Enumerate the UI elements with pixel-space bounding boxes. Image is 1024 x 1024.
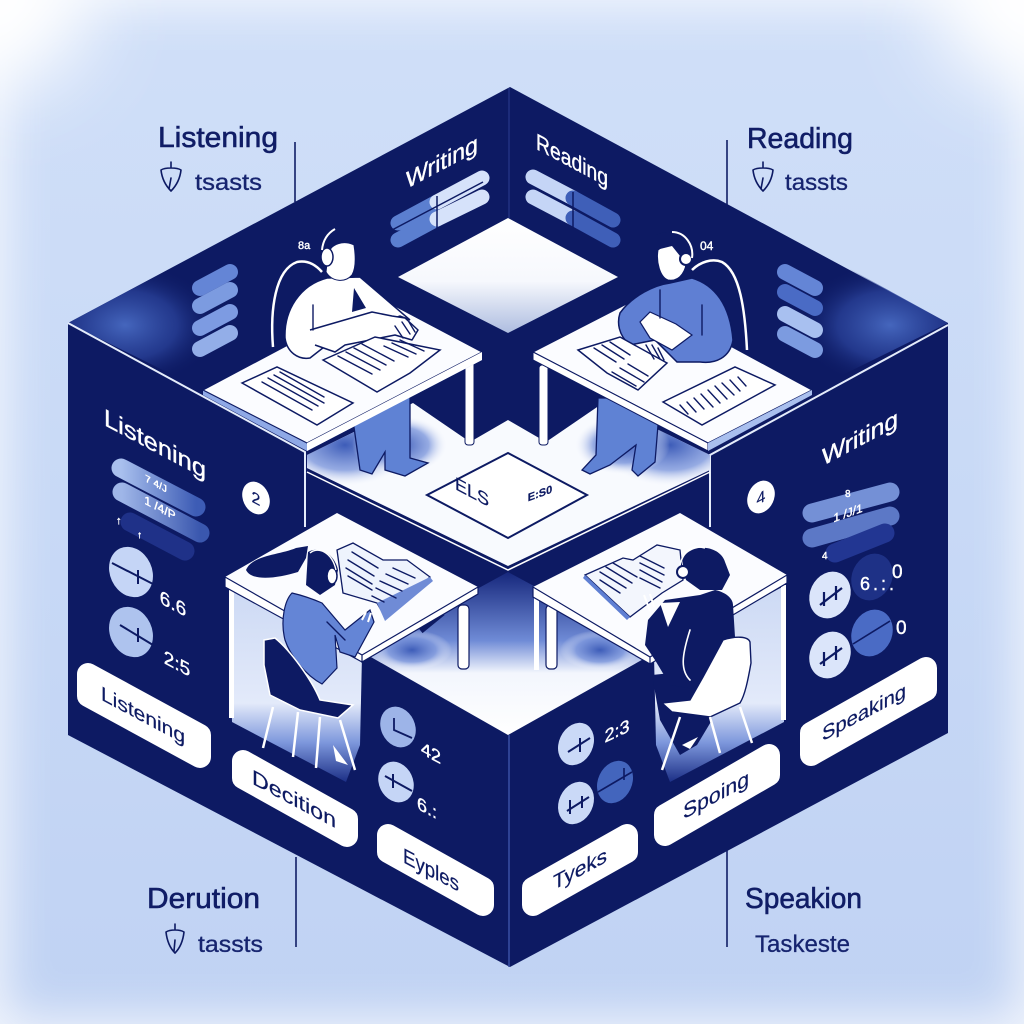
desk bottom left with person xyxy=(225,513,478,770)
right wall pills: 1 /J/1 xyxy=(833,501,863,525)
center left dials: 42 xyxy=(421,739,441,769)
pill: Decition xyxy=(243,761,347,836)
top left caption: Listening: tsasts xyxy=(195,169,262,195)
right wall pills: 8 xyxy=(845,489,851,500)
right wall pills: 4 xyxy=(822,551,828,562)
left wall pills: ↑ xyxy=(116,515,122,527)
right wall label: Writing: Writing xyxy=(822,405,898,472)
torso xyxy=(619,278,733,362)
alcove right xyxy=(654,585,786,782)
pill: Speaking xyxy=(811,668,926,755)
desk leg xyxy=(465,360,474,445)
right wall pills xyxy=(812,489,890,562)
legs xyxy=(582,398,658,476)
headphones xyxy=(321,229,335,266)
desk legs xyxy=(229,590,234,718)
top left caption: Listening: Listening xyxy=(158,122,278,154)
legs xyxy=(353,395,428,476)
open book xyxy=(583,545,683,620)
pill: Listening: Listening xyxy=(101,682,185,749)
wall seams xyxy=(68,323,948,527)
person tag: 04 xyxy=(700,239,714,253)
bottom left caption: Derution xyxy=(147,857,296,957)
lower body xyxy=(652,670,712,755)
top right caption: Reading: Reading xyxy=(747,123,853,155)
top left caption: Listening xyxy=(158,122,295,202)
left wall pills: 7 4/J xyxy=(145,473,167,496)
torso xyxy=(283,593,374,684)
open book xyxy=(578,337,667,390)
pill: Decition: Decition xyxy=(252,765,336,833)
hair xyxy=(246,546,308,578)
center left dials: 6.: xyxy=(417,794,437,824)
back wall pills right xyxy=(785,272,815,350)
chair arc xyxy=(692,260,747,350)
badge 4 xyxy=(742,476,780,518)
desk top right with person xyxy=(533,232,812,476)
pill: Listening xyxy=(88,674,200,757)
desk bottom right with person xyxy=(533,513,787,770)
top diamond xyxy=(398,218,618,333)
bottom right caption: Speakion: Speakion xyxy=(745,883,862,915)
left wall dials: 2:5 xyxy=(164,647,190,682)
center left dials xyxy=(372,701,441,824)
pill: Tyeks: Tyeks xyxy=(553,843,607,895)
ELS card: E:S0 xyxy=(528,484,552,504)
desk xyxy=(225,513,478,655)
bottom left caption: Derution: Derution xyxy=(147,883,260,915)
headphones xyxy=(672,232,692,265)
desk xyxy=(533,513,787,657)
head xyxy=(306,550,338,595)
pill: Speaking: Speaking xyxy=(822,679,906,746)
left wall pills: 1 /4/P xyxy=(144,492,176,523)
head xyxy=(657,245,686,280)
ELS card xyxy=(427,453,587,538)
right wall dials: 0 xyxy=(892,562,903,583)
paper xyxy=(242,367,353,425)
pill: Eyples: Eyples xyxy=(403,843,459,897)
top right caption: Reading: tassts xyxy=(785,169,848,195)
right wall dials: 0 xyxy=(896,618,907,639)
badge 4: 4 xyxy=(757,487,765,509)
head xyxy=(326,243,355,280)
left wall dials xyxy=(101,540,190,682)
pill: Tyeks xyxy=(533,835,627,905)
right wall dials xyxy=(802,547,907,685)
badge 2 xyxy=(237,477,275,519)
back wall label: Writing: Writing xyxy=(406,130,478,195)
cube body xyxy=(68,87,948,967)
left wall pills: ↑ xyxy=(137,530,142,541)
head xyxy=(682,548,730,590)
back wall label: Writing xyxy=(392,130,483,240)
pill: Spoing xyxy=(665,755,769,835)
lower floor xyxy=(362,572,656,735)
desk xyxy=(203,297,482,451)
paper xyxy=(663,367,775,425)
left wall label: Listening: Listening xyxy=(104,404,206,485)
left wall pills xyxy=(116,468,200,551)
top right caption: Reading xyxy=(727,123,853,205)
left wall dials: 6.6 xyxy=(160,587,186,622)
torso xyxy=(645,590,735,690)
chair xyxy=(263,638,355,770)
desk xyxy=(533,297,812,443)
arm and sleeve xyxy=(310,312,418,352)
ELS card: ELS xyxy=(455,474,489,512)
back wall label: Reading: Reading xyxy=(536,129,608,193)
central floor xyxy=(306,403,710,571)
bottom right caption: Speakion: Taskeste xyxy=(755,931,850,958)
chair xyxy=(662,637,752,770)
back wall pills left xyxy=(200,272,230,349)
alcove left xyxy=(230,585,362,782)
hands xyxy=(644,594,654,611)
torso xyxy=(285,277,410,358)
right wall dials: 6.:. xyxy=(860,574,894,594)
person tag: 8a xyxy=(298,240,311,252)
pill: Spoing: Spoing xyxy=(683,766,749,824)
headphones xyxy=(677,547,705,578)
chair arc xyxy=(272,261,322,347)
center right dials xyxy=(551,716,640,830)
center right dials: 2:3 xyxy=(604,716,630,748)
desk top left with person xyxy=(203,229,482,476)
open book xyxy=(337,543,433,621)
right top corner shading xyxy=(814,270,948,368)
back wall label: Reading xyxy=(528,129,618,240)
bottom left caption: Derution: tassts xyxy=(198,931,263,957)
desk leg xyxy=(539,365,548,445)
pill: Eyples xyxy=(388,835,483,905)
bottom right caption: Speakion xyxy=(727,850,862,958)
open book xyxy=(323,337,440,392)
badge 2: 2 xyxy=(252,488,260,510)
headphones xyxy=(310,550,337,584)
desk legs xyxy=(781,585,786,720)
left top corner shading xyxy=(69,279,200,368)
